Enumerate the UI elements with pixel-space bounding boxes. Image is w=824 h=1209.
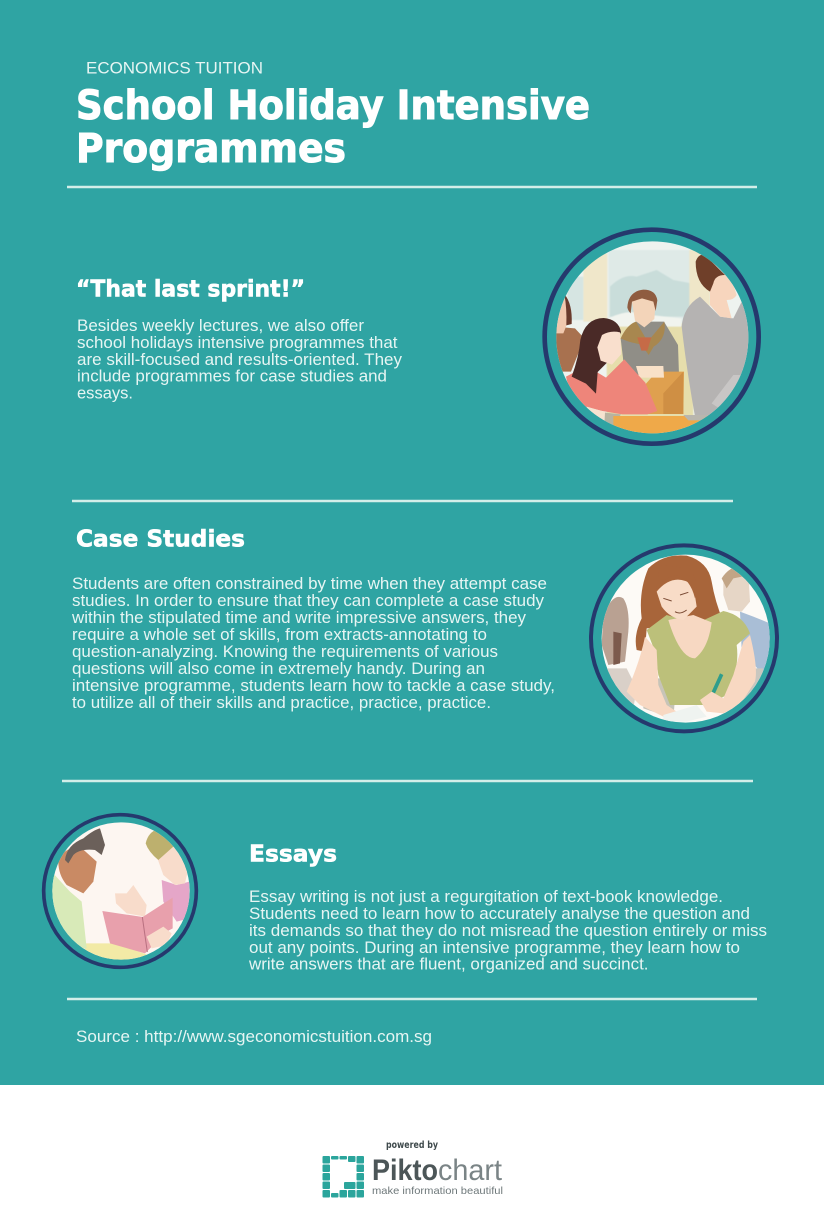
paper	[663, 705, 707, 722]
hand on book	[147, 927, 172, 948]
text block: essays: out any points. During an intensive programme, they learn how to	[249, 939, 740, 957]
box on table	[643, 372, 684, 414]
icon: girl writing exam	[591, 545, 777, 731]
piktochart wordmark: Pikto	[372, 1154, 438, 1187]
text block: case studies: to utilize all of their skills and practice, practice, practice.	[72, 694, 491, 712]
text block: case studies: within the stipulated time and write impressive answers, they	[71, 609, 527, 627]
right boy	[682, 297, 752, 417]
panel: case studies	[71, 524, 777, 731]
left person	[556, 327, 582, 372]
desk	[643, 678, 674, 712]
girl hair back	[636, 555, 725, 652]
piktochart wordmark: chart	[438, 1154, 503, 1187]
pen	[712, 673, 723, 693]
source line: Source : http://www.sgeconomicstuition.com.sg	[76, 1028, 432, 1046]
powered by label: powered by	[386, 1140, 439, 1151]
heading: that last sprint: “That last sprint!”	[76, 274, 305, 302]
header	[76, 60, 590, 172]
text block: intro: Besides weekly lectures, we also offer	[77, 317, 365, 335]
text block: case studies: intensive programme, students learn how to tackle a case study,	[72, 677, 555, 695]
text block: intro: school holidays intensive programmes that	[77, 334, 398, 352]
title: Programmes	[76, 126, 346, 172]
footer: piktochart branding	[322, 1140, 503, 1198]
hand	[115, 885, 147, 917]
back right student	[723, 570, 750, 612]
text block: intro: are skill-focused and results-oriented. They	[77, 351, 403, 369]
panel: that last sprint	[76, 230, 759, 444]
text block: intro	[77, 317, 403, 402]
face	[657, 580, 697, 620]
title: School Holiday Intensive	[76, 83, 590, 129]
table	[85, 943, 147, 960]
heading: essays: Essays	[249, 840, 337, 868]
icon: students in classroom	[545, 230, 759, 444]
text block: essays: Essay writing is not just a regurgitation of text-book knowledge.	[249, 888, 723, 906]
right student	[162, 880, 189, 922]
left student	[52, 872, 87, 950]
tagline: make information beautiful	[372, 1185, 503, 1197]
title	[76, 83, 590, 172]
back left student	[602, 597, 629, 665]
text block: case studies: question-analyzing. Knowing the requirements of various	[72, 643, 498, 661]
text block: case studies: studies. In order to ensure that they can complete a case study	[72, 592, 545, 610]
girl	[566, 359, 657, 414]
icon: two students reading	[44, 815, 196, 967]
text block: case studies	[71, 575, 555, 712]
panel: essays	[44, 815, 767, 974]
text block: essays	[248, 888, 767, 974]
text block: case studies: questions will also come in extremely handy. During an	[72, 660, 485, 678]
table	[613, 416, 708, 434]
text block: essays: Students need to learn how to accurately analyse the question and	[249, 905, 750, 923]
text block: essays: write answers that are fluent, organized and succinct.	[248, 956, 649, 974]
text block: case studies: Students are often constrained by time when they attempt case	[72, 575, 547, 593]
icon: piktochart logo	[322, 1156, 364, 1198]
eyebrow label: ECONOMICS TUITION	[86, 60, 263, 78]
text block: intro: essays.	[77, 384, 133, 402]
text block: case studies: require a whole set of skills, from extracts-annotating to	[72, 626, 487, 644]
girl body	[647, 611, 750, 705]
text block: essays: its demands so that they do not misread the question entirely or miss	[249, 922, 767, 940]
booklet	[102, 898, 173, 953]
center boy	[621, 322, 679, 375]
piktochart wordmark	[372, 1154, 503, 1187]
text block: intro: include programmes for case studies and	[77, 368, 387, 386]
heading: case studies: Case Studies	[76, 524, 245, 552]
